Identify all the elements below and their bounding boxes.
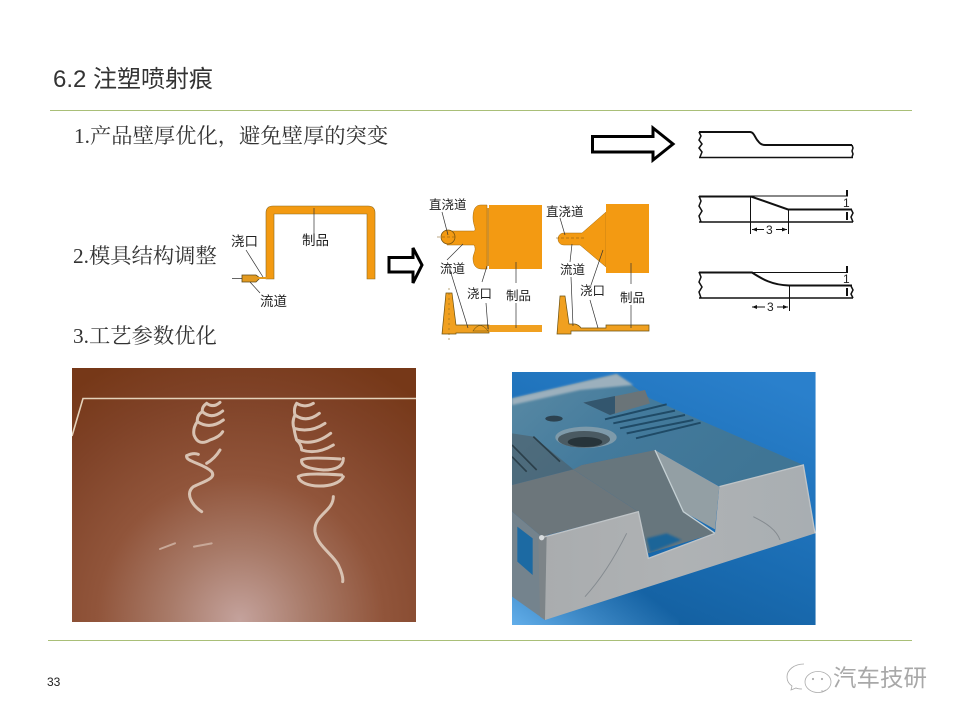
label: runner B: 流道 [560, 263, 586, 277]
rear highlight [512, 374, 633, 405]
leader lines [232, 208, 314, 293]
top view: fan gate [556, 204, 649, 273]
bottom divider [48, 640, 912, 642]
label: sprue B: 直浇道 [546, 205, 584, 219]
label: gate B: 浇口 [580, 284, 605, 298]
watermark: text: 汽车技研 [833, 665, 927, 691]
faint streaks [160, 543, 212, 549]
top surface [512, 374, 803, 487]
background [512, 372, 816, 625]
label: runner: 流道 [260, 294, 287, 309]
diagram: original gate U-shaped part [231, 206, 375, 309]
U-shaped product [266, 206, 375, 279]
arrow: large outline arrow [592, 128, 673, 160]
front corner [538, 535, 547, 620]
notch edge highlight [655, 450, 715, 533]
profile: abrupt rounded transition [699, 132, 853, 158]
side view: fan gate [557, 296, 649, 334]
profile: curved taper with dimensions: 3 [767, 300, 774, 314]
label: gate A: 浇口 [467, 287, 492, 301]
text: step 2: 2.模具结构调整 [73, 244, 217, 268]
profile: linear taper with dimensions [699, 190, 853, 237]
arrow: middle hollow arrow [389, 248, 422, 283]
highlights [542, 465, 815, 558]
profile: curved taper with dimensions [699, 266, 853, 314]
flow scratch marks [585, 517, 780, 597]
left jetting mark [187, 402, 223, 512]
notch right wall [655, 450, 719, 529]
top view: film gate [437, 205, 542, 269]
jetting marks [160, 402, 343, 582]
round hole [545, 416, 617, 448]
rear notch opening [583, 396, 615, 415]
diagram: gate layouts [429, 198, 649, 340]
blue reflection on notch floor [647, 533, 682, 553]
title: 6.2 注塑喷射痕 [53, 66, 213, 93]
photo: jetting marks on brown plate [72, 368, 416, 622]
watermark: WeChat icon [787, 664, 831, 692]
leader lines [442, 212, 631, 329]
dark left panel [512, 433, 573, 485]
corner glint [539, 535, 544, 540]
runner [242, 275, 260, 282]
runner-to-gate connector [258, 277, 267, 279]
photo: grey plastic part on blue background [512, 372, 816, 625]
profile: linear taper with dimensions: 3 [766, 223, 773, 237]
label: gate: 浇口 [231, 234, 258, 249]
text: step 1: 1.产品壁厚优化，避免壁厚的突变 [74, 124, 388, 149]
text: step 3: 3.工艺参数优化 [73, 324, 217, 348]
window [517, 527, 533, 575]
textured block top [512, 469, 638, 537]
profile: linear taper with dimensions: 1 [843, 196, 850, 210]
label: runner A: 流道 [440, 262, 466, 276]
label: product B: 制品 [620, 291, 645, 305]
left slots [512, 437, 560, 472]
label: product: 制品 [302, 233, 329, 248]
side view: film gate [442, 288, 542, 340]
plate edge [72, 398, 416, 436]
profile: curved taper with dimensions: 1 [843, 272, 850, 286]
page number: 33 [47, 675, 61, 689]
label: product A: 制品 [506, 289, 531, 303]
notch interior [573, 450, 715, 553]
rear notch [583, 390, 650, 415]
top divider [50, 110, 912, 112]
right jetting mark [293, 403, 343, 582]
vent slots [605, 404, 701, 438]
front face [540, 465, 815, 620]
diagram: wall thickness profiles [699, 132, 853, 314]
label: sprue A: 直浇道 [429, 198, 467, 212]
left side [512, 512, 545, 620]
